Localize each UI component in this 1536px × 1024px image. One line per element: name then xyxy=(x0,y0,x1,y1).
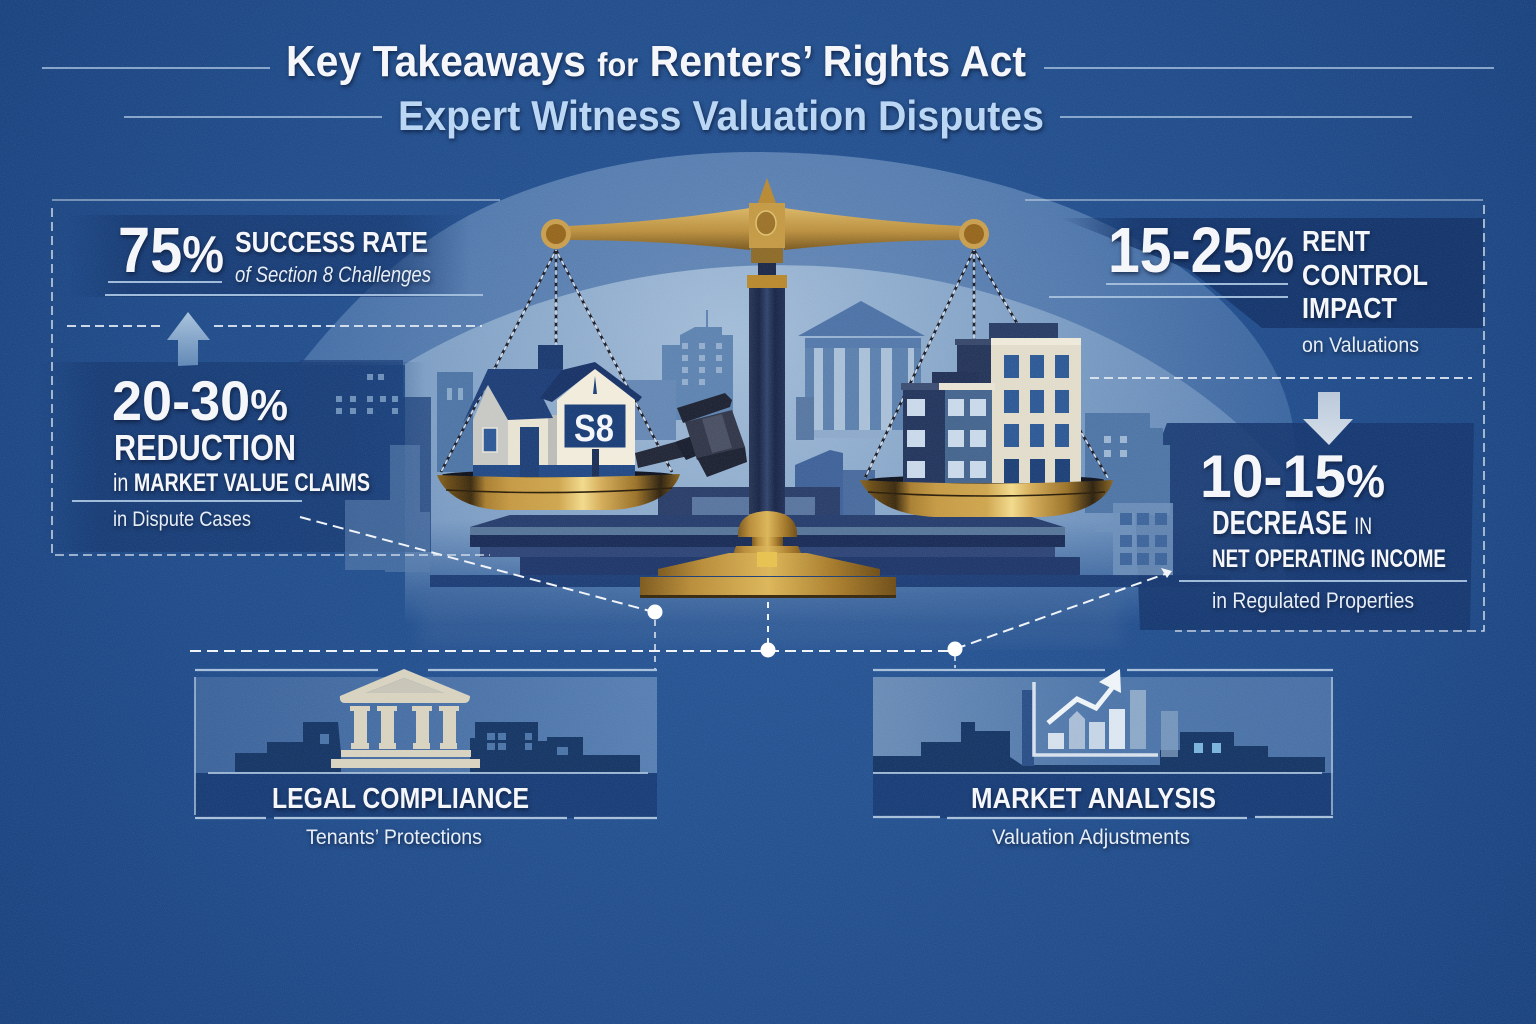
scale: column xyxy=(747,263,787,514)
stat: 75 percent success rate: SUCCESS RATE xyxy=(235,227,428,259)
frame lines: market xyxy=(873,670,1333,818)
podium xyxy=(420,487,1230,645)
frame lines: legal xyxy=(195,670,657,818)
subtitle: Expert Witness Valuation Disputes xyxy=(398,92,1044,139)
panel: market analysis xyxy=(873,669,1333,849)
label: market analysis: Valuation Adjustments xyxy=(992,826,1190,849)
stat: 20-30 percent reduction xyxy=(112,369,370,531)
gavel xyxy=(635,393,747,477)
stat: 75 percent success rate: 75% xyxy=(118,214,224,286)
title rules xyxy=(42,68,1494,117)
stat: 15-25 percent rent control impact: RENT xyxy=(1302,226,1370,258)
left pan interior xyxy=(442,470,674,480)
central dome backdrop xyxy=(300,152,1295,640)
stat: 20-30 percent reduction: REDUCTION xyxy=(114,427,296,468)
stat: 20-30 percent reduction: 20-30% xyxy=(112,369,288,432)
stat: 20-30 percent reduction: in MARKET VALUE CLAIMS xyxy=(113,469,370,497)
stat: 15-25 percent rent control impact xyxy=(1108,214,1428,357)
scale: chains right xyxy=(865,250,1108,478)
stat: 75 percent success rate xyxy=(118,214,431,287)
panel: left stats frame and lines xyxy=(52,200,500,555)
panel: left stat backdrops xyxy=(40,215,470,552)
arrow: down xyxy=(1303,392,1353,445)
label: market analysis xyxy=(971,783,1216,849)
stat: 20-30 percent reduction: in Dispute Cases xyxy=(113,508,251,531)
stat: 10-15 percent decrease: in Regulated Properties xyxy=(1212,588,1414,613)
connector: dashed lines and nodes xyxy=(190,517,1172,670)
background skyline xyxy=(336,301,1173,576)
stat: 10-15 percent decrease xyxy=(1200,443,1446,613)
label: legal compliance: Tenants’ Protections xyxy=(306,826,482,849)
scale: chains left xyxy=(441,250,672,472)
background court building xyxy=(795,301,925,520)
scale: base xyxy=(640,511,896,598)
skyline: legal xyxy=(235,722,640,772)
panel: right stats frame and lines xyxy=(1025,200,1484,631)
S8 sign: S8 xyxy=(574,408,614,450)
buildings on right pan xyxy=(901,323,1081,483)
icon: courthouse xyxy=(331,669,480,768)
stat: 75 percent success rate: of Section 8 Challenges xyxy=(235,262,431,287)
scale: beam xyxy=(541,178,989,263)
right pan interior xyxy=(868,475,1104,485)
skyline: market xyxy=(873,722,1325,772)
label: market analysis: MARKET ANALYSIS xyxy=(971,783,1216,815)
S8 sign xyxy=(564,404,626,477)
house on left pan xyxy=(463,345,642,477)
stat: 15-25 percent rent control impact: on Valuations xyxy=(1302,334,1419,357)
title: Key Takeaways for Renters’ Rights Act xyxy=(286,37,1026,86)
stat: 15-25 percent rent control impact: IMPACT xyxy=(1302,293,1397,325)
stat: 10-15 percent decrease: 10-15% xyxy=(1200,443,1385,510)
left pan xyxy=(437,474,680,510)
arrow: up xyxy=(167,312,210,366)
label: legal compliance xyxy=(272,783,529,849)
right pan xyxy=(860,480,1113,517)
stat: 10-15 percent decrease: DECREASE IN xyxy=(1212,504,1372,541)
stat: 15-25 percent rent control impact: 15-25% xyxy=(1108,214,1294,286)
stat: 10-15 percent decrease: NET OPERATING INCOME xyxy=(1212,545,1446,573)
label: legal compliance: LEGAL COMPLIANCE xyxy=(272,783,529,815)
panel: right stat backdrops xyxy=(1060,218,1483,630)
panel: legal compliance xyxy=(195,669,657,849)
icon: rising chart xyxy=(1034,669,1158,755)
stat: 15-25 percent rent control impact: CONTROL xyxy=(1302,260,1428,292)
